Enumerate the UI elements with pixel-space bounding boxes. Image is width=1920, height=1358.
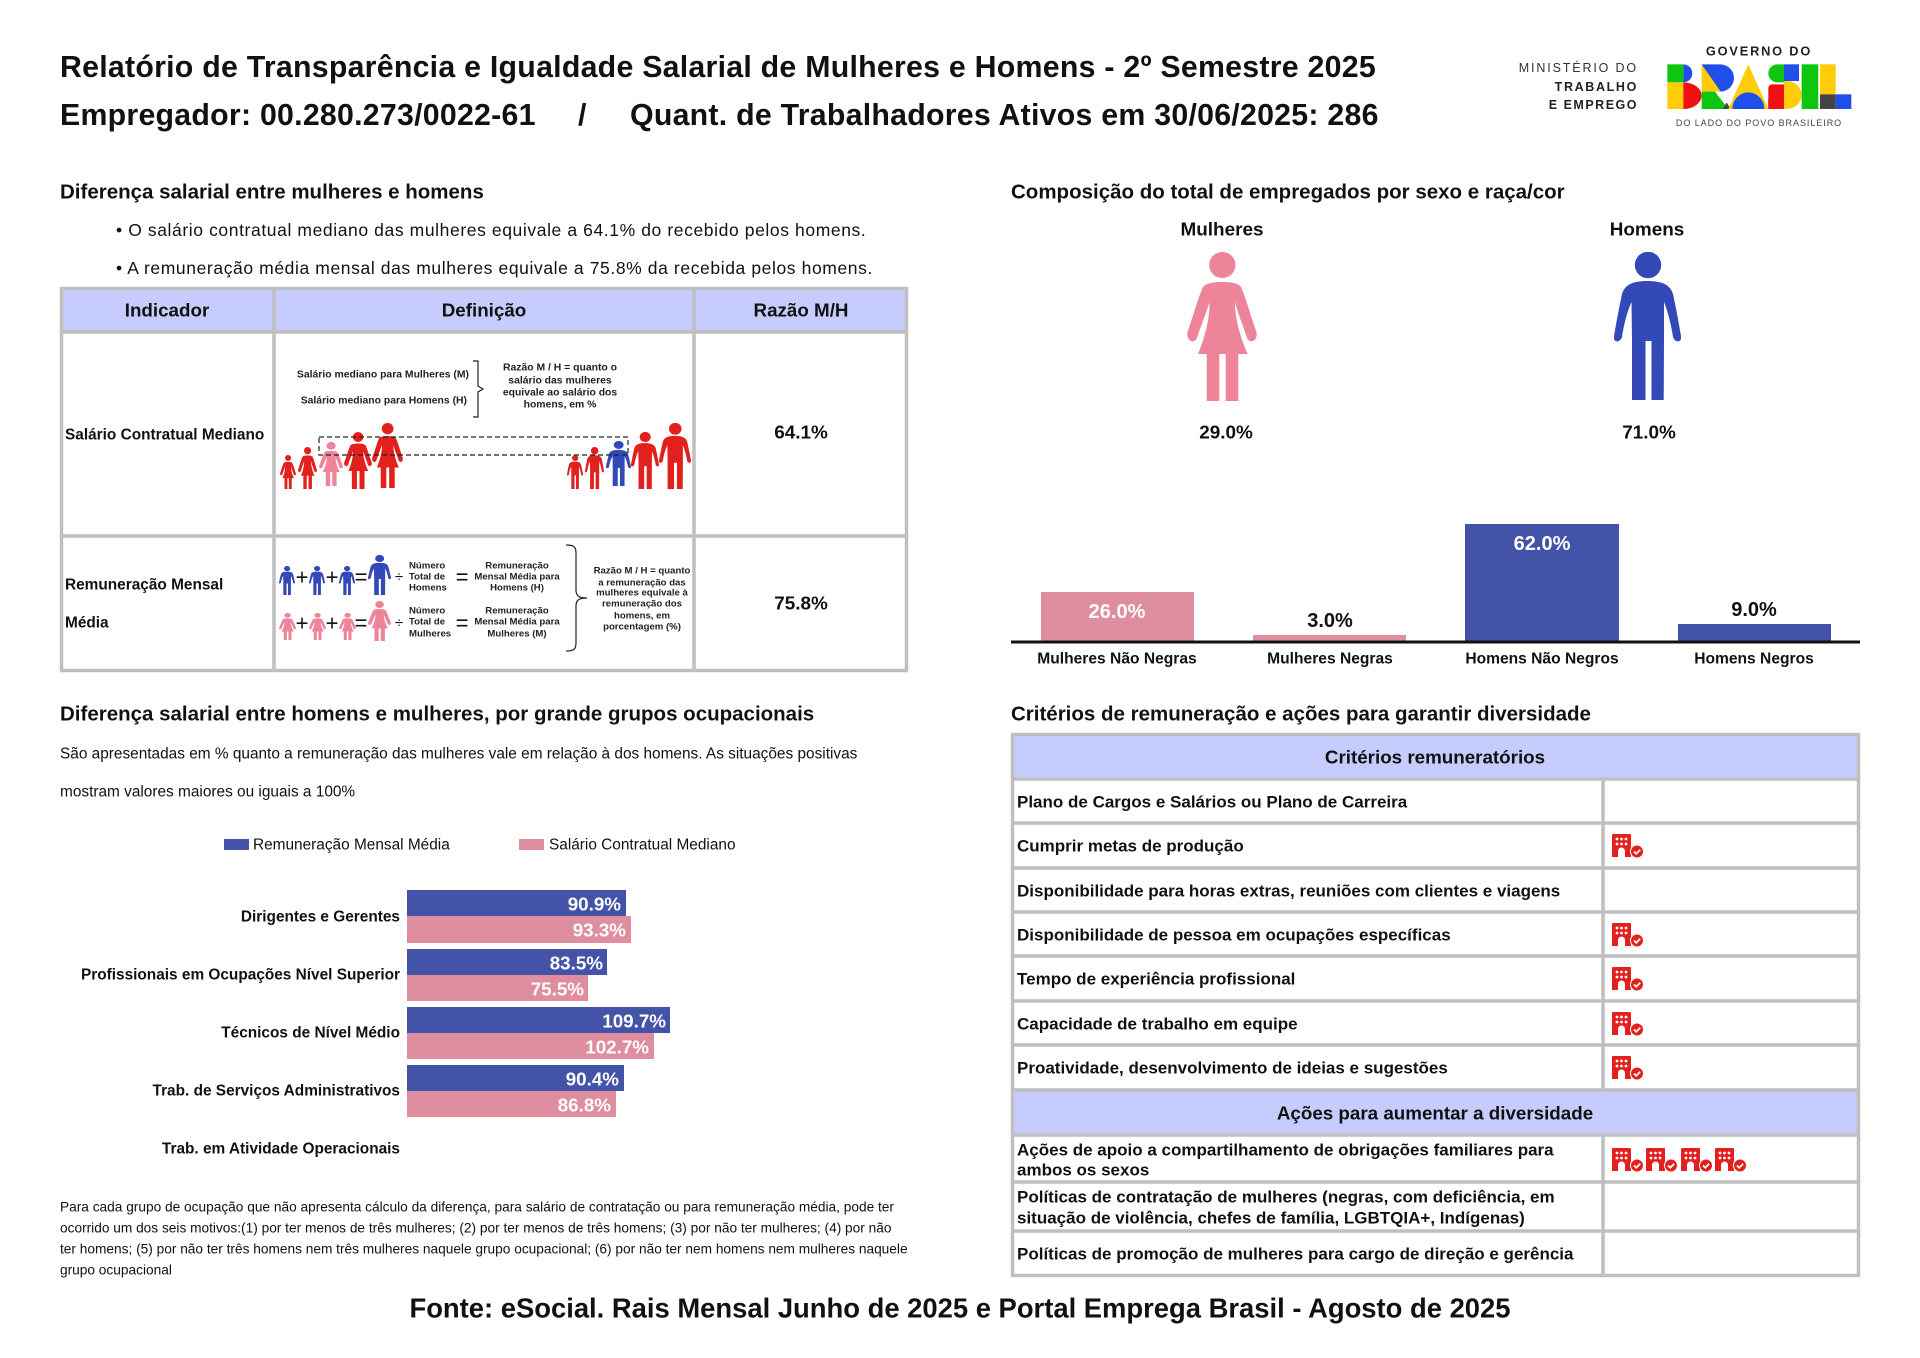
legend: Remuneração Mensal Média xyxy=(253,836,450,854)
bar chart: sexo e raça/cor: Homens Não Negros xyxy=(1465,650,1619,668)
bar chart: sexo e raça/cor: 62.0% xyxy=(1514,533,1571,555)
title: / xyxy=(578,99,587,132)
bar chart: grupos ocupacionais: 90.4% xyxy=(566,1068,619,1090)
bar chart: grupos ocupacionais: Trab. de Serviços Administrativos xyxy=(153,1082,400,1100)
row: cumprir metas: Cumprir metas de produção xyxy=(1017,836,1244,856)
row: contratação: situação de violência, chefes de família, LGBTQIA+, Indígenas) xyxy=(1017,1208,1525,1228)
text block: descrição: São apresentadas em % quanto a remuneração das mulheres vale em relação à dos homens. As situações positivas xyxy=(60,746,858,762)
bar chart: grupos ocupacionais: Profissionais em Ocupações Nível Superior xyxy=(81,966,400,984)
row: trabalho em equipe xyxy=(1017,1012,1644,1036)
bar chart: grupos ocupacionais xyxy=(81,890,670,1158)
row: remuneração mensal média: Média xyxy=(65,614,109,632)
diagram: remuneração média: mulheres equivale à xyxy=(596,588,689,598)
section header: ações: Ações para aumentar a diversidade xyxy=(1277,1102,1593,1124)
row: compartilhamento: ambos os sexos xyxy=(1017,1160,1149,1180)
row: contratação xyxy=(1017,1188,1555,1228)
diagram: remuneração média: homens, em xyxy=(614,610,670,622)
pictogram: mulheres: 29.0% xyxy=(1199,422,1253,444)
panel: composição por sexo e raça/cor xyxy=(1011,180,1860,668)
diagram: remuneração média: porcentagem (%) xyxy=(603,622,681,632)
pictogram: mulheres xyxy=(1181,220,1263,444)
row: disponibilidade ocupações xyxy=(1017,923,1644,947)
diagram: remuneração média: Mensal Média para xyxy=(474,572,560,582)
diagram: remuneração média: Mulheres xyxy=(409,628,451,640)
table header: Indicador xyxy=(125,300,210,320)
table header: Razão M/H xyxy=(754,300,848,320)
diagram: salário mediano xyxy=(280,361,691,489)
diagram: remuneração média: remuneração dos xyxy=(602,598,682,610)
legend: Salário Contratual Mediano xyxy=(549,836,736,854)
diagram: remuneração média: = xyxy=(456,610,468,636)
row: proatividade xyxy=(1017,1056,1644,1080)
section header: critérios remuneratórios: Critérios remuneratórios xyxy=(1325,746,1545,768)
pictogram: homens: Homens xyxy=(1610,220,1684,240)
table header: Definição xyxy=(442,300,526,320)
diagram: remuneração média: a remuneração das xyxy=(598,578,686,588)
text block: resumo: • O salário contratual mediano das mulheres equivale a 64.1% do recebido pelos homens. xyxy=(116,220,866,240)
logo: Ministério do Trabalho e Emprego: TRABALHO xyxy=(1555,80,1638,94)
diagram: remuneração média: ÷ xyxy=(395,614,403,632)
table header xyxy=(125,300,848,320)
pictogram: homens: 71.0% xyxy=(1622,422,1676,444)
bar chart: grupos ocupacionais: 83.5% xyxy=(550,952,603,974)
diagram: salário mediano: Razão M / H = quanto o xyxy=(503,362,617,374)
title: Relatório de Transparência e Igualdade Salarial de Mulheres e Homens - 2º Semestre 2025 xyxy=(60,51,1376,84)
bar chart: sexo e raça/cor: 3.0% xyxy=(1307,610,1353,632)
diagram: salário mediano: homens, em % xyxy=(524,400,596,410)
bar chart: grupos ocupacionais: Técnicos de Nível Médio xyxy=(221,1024,400,1042)
footnote xyxy=(60,1200,908,1278)
bar chart: grupos ocupacionais: 90.9% xyxy=(568,894,621,914)
panel: diferença salarial xyxy=(60,180,907,670)
text block: descrição: mostram valores maiores ou iguais a 100% xyxy=(60,784,355,800)
row: compartilhamento: Ações de apoio a compartilhamento de obrigações familiares para xyxy=(1017,1140,1554,1160)
row: salário contratual mediano: 64.1% xyxy=(774,422,828,444)
bar chart: grupos ocupacionais: 75.5% xyxy=(531,978,584,1000)
panel: grandes grupos ocupacionais xyxy=(60,702,908,1278)
heading: diferença salarial: Diferença salarial entre mulheres e homens xyxy=(60,180,484,204)
row: tempo de experiência: Tempo de experiência profissional xyxy=(1017,970,1295,988)
diagram: remuneração média: = xyxy=(456,564,468,590)
bar chart: sexo e raça/cor: Homens Negros xyxy=(1694,650,1814,668)
heading: grupos ocupacionais: Diferença salarial entre homens e mulheres, por grande grupos ocupacionais xyxy=(60,702,814,726)
row: compartilhamento xyxy=(1017,1140,1746,1180)
logo: Governo do Brasil xyxy=(1667,44,1851,128)
diagram: remuneração média: + xyxy=(296,610,308,636)
bar chart: sexo e raça/cor: 26.0% xyxy=(1089,601,1146,623)
row: trabalho em equipe: Capacidade de trabalho em equipe xyxy=(1017,1014,1298,1034)
bar chart: sexo e raça/cor xyxy=(1011,524,1860,668)
source note: Fonte: eSocial. Rais Mensal Junho de 2025 e Portal Emprega Brasil - Agosto de 2025 xyxy=(409,1292,1511,1324)
diagram: remuneração média: Total de xyxy=(409,572,445,582)
panel: critérios de remuneração xyxy=(1011,702,1858,1276)
pictogram: mulheres: Mulheres xyxy=(1181,220,1263,240)
bar chart: grupos ocupacionais: 109.7% xyxy=(602,1010,666,1032)
heading: composição: Composição do total de empregados por sexo e raça/cor xyxy=(1011,180,1565,204)
diagram: remuneração média: Homens (H) xyxy=(490,582,544,594)
title: Empregador: 00.280.273/0022-61 xyxy=(60,99,536,132)
row: plano de cargos: Plano de Cargos e Salários ou Plano de Carreira xyxy=(1017,792,1408,812)
row: cumprir metas xyxy=(1017,834,1644,858)
text block: descrição xyxy=(60,746,858,800)
diagram: remuneração média: = xyxy=(355,610,367,636)
diagram: remuneração média: Remuneração xyxy=(485,560,549,572)
row: salário contratual mediano xyxy=(65,422,828,444)
bar chart: sexo e raça/cor: 9.0% xyxy=(1731,599,1777,621)
table: indicadores xyxy=(61,288,907,670)
diagram: salário mediano: equivale ao salário dos xyxy=(503,388,617,398)
diagram: remuneração média: Remuneração xyxy=(485,606,549,616)
text block: resumo: • A remuneração média mensal das mulheres equivale a 75.8% da recebida pelos homens. xyxy=(116,258,873,278)
legend xyxy=(224,836,736,854)
diagram: remuneração média: Homens xyxy=(409,582,447,594)
diagram: remuneração média: Mensal Média para xyxy=(474,616,560,628)
bar chart: grupos ocupacionais: Trab. em Atividade Operacionais xyxy=(162,1140,400,1158)
diagram: remuneração média: Número xyxy=(409,606,445,616)
footnote: ocorrido um dos seis motivos:(1) por ter menos de três mulheres; (2) por ter menos de três homens; (3) por não ter mulheres; (4) por não xyxy=(60,1220,892,1236)
text block: resumo xyxy=(116,220,873,278)
diagram: remuneração média: = xyxy=(355,564,367,590)
bar chart: sexo e raça/cor: Mulheres Negras xyxy=(1267,650,1393,668)
diagram: remuneração média: + xyxy=(326,564,338,590)
diagram: remuneração média: Número xyxy=(409,560,445,572)
bar chart: grupos ocupacionais: 86.8% xyxy=(558,1094,611,1116)
diagram: remuneração média: Total de xyxy=(409,616,445,628)
diagram: remuneração média: ÷ xyxy=(395,568,403,586)
diagram: remuneração média xyxy=(279,545,691,651)
footnote: Para cada grupo de ocupação que não apresenta cálculo da diferença, para salário de contratação ou para remuneração média, pode ter xyxy=(60,1200,894,1214)
logo: Governo do Brasil: DO LADO DO POVO BRASILEIRO xyxy=(1676,118,1842,128)
diagram: remuneração média: Razão M / H = quanto xyxy=(594,566,691,576)
title: Quant. de Trabalhadores Ativos em 30/06/2025: 286 xyxy=(630,99,1379,132)
row: remuneração mensal média xyxy=(65,576,828,632)
logo: Ministério do Trabalho e Emprego: MINISTÉRIO DO xyxy=(1519,60,1638,75)
row: remuneração mensal média: Remuneração Mensal xyxy=(65,576,223,594)
diagram: remuneração média: + xyxy=(326,610,338,636)
diagram: remuneração média: + xyxy=(296,564,308,590)
diagram: salário mediano: Salário mediano para Mulheres (M) xyxy=(297,370,469,380)
table: critérios e ações xyxy=(1012,734,1858,1276)
bar chart: sexo e raça/cor: Mulheres Não Negras xyxy=(1037,650,1197,668)
row: contratação: Políticas de contratação de mulheres (negras, com deficiência, em xyxy=(1017,1188,1555,1206)
row: remuneração mensal média: 75.8% xyxy=(774,594,828,614)
footnote: ter homens; (5) por não ter três homens nem três mulheres naquele grupo ocupacional; (6) por não ter nem homens nem mulheres naquele xyxy=(60,1242,908,1256)
row: tempo de experiência xyxy=(1017,967,1644,991)
diagram: salário mediano: Salário mediano para Homens (H) xyxy=(301,396,467,406)
pictogram: homens xyxy=(1610,220,1684,444)
row: salário contratual mediano: Salário Contratual Mediano xyxy=(65,426,264,444)
logo: Ministério do Trabalho e Emprego xyxy=(1519,60,1638,112)
row: proatividade: Proatividade, desenvolvimento de ideias e sugestões xyxy=(1017,1058,1448,1078)
row: disponibilidade ocupações: Disponibilidade de pessoa em ocupações específicas xyxy=(1017,926,1451,944)
bar chart: grupos ocupacionais: 102.7% xyxy=(585,1036,649,1058)
row: promoção: Políticas de promoção de mulheres para cargo de direção e gerência xyxy=(1017,1244,1574,1264)
diagram: remuneração média: Mulheres (M) xyxy=(487,628,547,640)
row: disponibilidade horas extras: Disponibilidade para horas extras, reuniões com clientes e viagens xyxy=(1017,882,1560,900)
bar chart: grupos ocupacionais: 93.3% xyxy=(573,920,626,940)
title xyxy=(60,51,1379,132)
heading: critérios: Critérios de remuneração e ações para garantir diversidade xyxy=(1011,702,1591,726)
footnote: grupo ocupacional xyxy=(60,1262,172,1278)
logo: Ministério do Trabalho e Emprego: E EMPREGO xyxy=(1549,98,1638,112)
bar chart: grupos ocupacionais: Dirigentes e Gerentes xyxy=(241,908,400,926)
logo: Governo do Brasil: GOVERNO DO xyxy=(1706,44,1812,58)
diagram: salário mediano: salário das mulheres xyxy=(508,376,612,386)
